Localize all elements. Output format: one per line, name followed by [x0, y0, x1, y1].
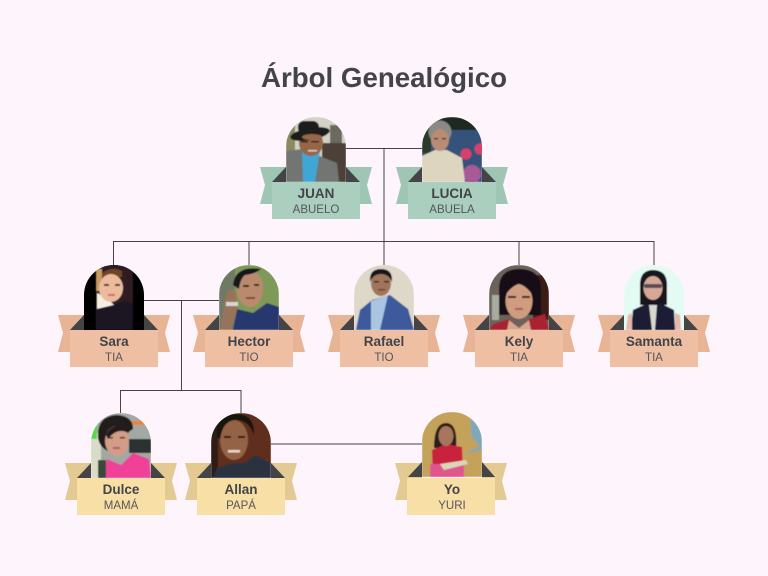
card: Juan — [260, 117, 372, 219]
card: Sara: Sara — [99, 334, 129, 349]
photo: Rafael — [354, 265, 414, 330]
photo: Hector — [219, 265, 279, 330]
card: Lucia — [396, 117, 508, 219]
card: Lucia: LUCIA — [431, 186, 473, 201]
photo: Juan — [286, 117, 346, 182]
card: Samanta — [598, 265, 710, 367]
photo: Yo — [422, 412, 482, 477]
card: Yo: Yo — [444, 482, 460, 497]
card: Sara — [58, 265, 170, 367]
card: Kely — [463, 265, 575, 367]
photo: Dulce — [91, 413, 151, 478]
card: Juan: ABUELO — [293, 204, 339, 216]
card: Yo: YURI — [438, 500, 466, 512]
card: Kely: Kely — [505, 334, 534, 349]
card: Sara: TIA — [105, 352, 123, 364]
card: Rafael — [328, 265, 440, 367]
card: Dulce — [65, 413, 177, 515]
photo: Lucia — [422, 117, 486, 183]
card: Lucia: ABUELA — [429, 204, 475, 216]
card: Samanta: Samanta — [626, 334, 683, 349]
card: Hector: TIO — [239, 352, 259, 364]
card: Allan: Allan — [224, 482, 258, 497]
card: Rafael: Rafael — [364, 334, 404, 349]
card: Dulce: Dulce — [103, 482, 140, 497]
photo: Sara — [84, 265, 144, 330]
connector lines — [114, 148, 654, 444]
title: Árbol Genealógico — [261, 62, 507, 93]
card: Hector — [193, 265, 305, 367]
photo: Allan — [211, 413, 271, 478]
photo: Kely — [489, 265, 549, 330]
card: Juan: JUAN — [298, 186, 334, 201]
card: Yo — [395, 412, 507, 515]
card: Samanta: TIA — [645, 352, 663, 364]
photo: Samanta — [624, 265, 684, 330]
card: Hector: Hector — [228, 334, 271, 349]
card: Allan — [185, 413, 297, 515]
card: Rafael: TIO — [374, 352, 394, 364]
card: Allan: PAPÁ — [226, 499, 256, 512]
card: Kely: TIA — [510, 352, 528, 364]
card: Dulce: MAMÁ — [104, 499, 139, 512]
